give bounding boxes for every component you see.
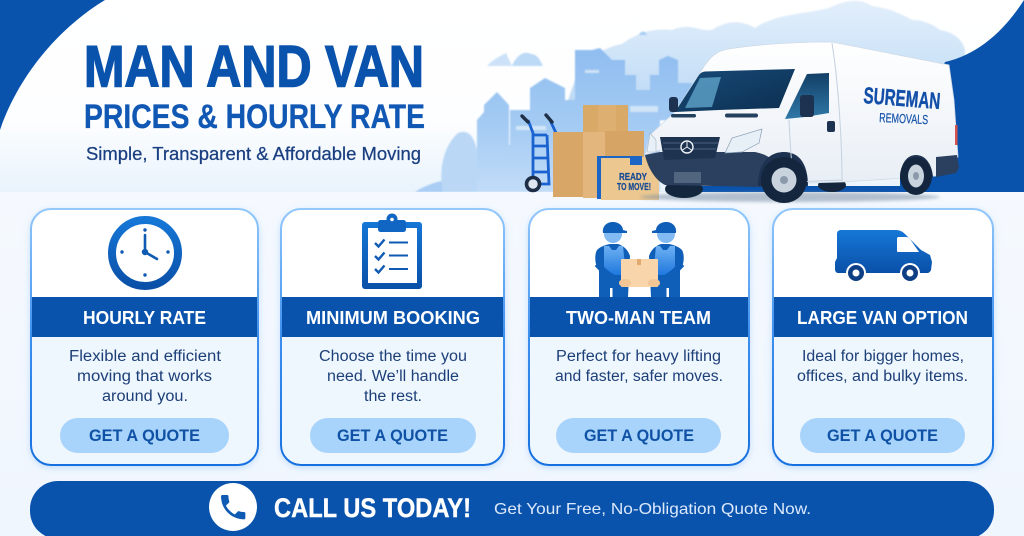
heading: MINIMUM BOOKING xyxy=(306,307,480,328)
card: large van option xyxy=(773,209,993,465)
mirrors xyxy=(800,95,814,117)
hand truck xyxy=(522,115,556,190)
wheel arches xyxy=(758,152,808,186)
van shadow xyxy=(640,192,940,202)
hood vents xyxy=(671,114,696,118)
icon: phone xyxy=(209,483,257,531)
icon: clipboard xyxy=(362,214,422,289)
card: hourly rate xyxy=(31,209,258,465)
heading: TWO-MAN TEAM xyxy=(566,307,711,328)
top-left blue corner xyxy=(0,0,105,130)
description: moving that works xyxy=(77,368,212,385)
description xyxy=(797,348,968,385)
rear wheel xyxy=(900,157,932,195)
description xyxy=(319,348,467,405)
grille xyxy=(660,137,720,160)
call subtext: Get Your Free, No-Obligation Quote Now. xyxy=(494,501,811,518)
mover left xyxy=(595,222,630,297)
white van xyxy=(645,42,959,203)
van branding xyxy=(863,82,941,127)
description: Perfect for heavy lifting xyxy=(556,348,721,365)
heading: LARGE VAN OPTION xyxy=(797,307,968,328)
description: offices, and bulky items. xyxy=(797,368,968,385)
description: around you. xyxy=(102,388,188,405)
button xyxy=(310,418,476,453)
badge xyxy=(681,141,693,153)
front wheel xyxy=(761,157,807,203)
button xyxy=(800,418,965,453)
hero banner xyxy=(0,0,1024,203)
button: GET A QUOTE xyxy=(827,427,938,445)
description: and faster, safer moves. xyxy=(555,368,723,385)
icon: clock xyxy=(112,220,178,286)
right blue sweep xyxy=(690,0,1024,192)
call to action bar xyxy=(30,481,994,536)
box label: READY xyxy=(619,171,647,183)
button xyxy=(60,418,229,453)
city skyline xyxy=(415,48,692,192)
bumper and trim xyxy=(645,152,778,187)
description: Flexible and efficient xyxy=(69,348,222,365)
button: GET A QUOTE xyxy=(337,427,448,445)
box label: TO MOVE! xyxy=(617,181,651,193)
tail light xyxy=(955,125,958,145)
button: GET A QUOTE xyxy=(584,427,694,445)
box label xyxy=(617,171,651,193)
clouds behind city xyxy=(487,1,965,120)
door lines xyxy=(789,43,842,182)
description: the rest. xyxy=(364,388,422,405)
van body xyxy=(645,42,958,184)
description xyxy=(69,348,222,405)
card: two-man team xyxy=(529,209,749,465)
van branding: SUREMAN xyxy=(863,82,941,114)
mover right xyxy=(649,222,684,297)
van branding: REMOVALS xyxy=(879,110,929,127)
hero background xyxy=(0,0,1024,192)
carried box xyxy=(619,259,660,287)
subtitle: PRICES & HOURLY RATE xyxy=(84,98,425,136)
icon: two movers with box xyxy=(595,222,684,297)
cardboard boxes xyxy=(553,105,659,200)
windshield xyxy=(675,69,795,112)
description: need. We’ll handle xyxy=(327,368,459,385)
call heading: CALL US TODAY! xyxy=(274,493,471,523)
headlights xyxy=(725,129,762,153)
button xyxy=(556,418,721,453)
tagline: Simple, Transparent & Affordable Moving xyxy=(86,144,421,164)
description: Choose the time you xyxy=(319,348,467,365)
description: Ideal for bigger homes, xyxy=(802,348,964,365)
heading: HOURLY RATE xyxy=(83,307,206,328)
icon: van xyxy=(835,230,932,283)
description xyxy=(555,348,723,385)
side window xyxy=(785,73,829,119)
main title: MAN AND VAN xyxy=(84,34,424,100)
card: minimum booking xyxy=(281,209,504,465)
title block xyxy=(84,34,425,164)
button: GET A QUOTE xyxy=(89,427,200,445)
far wheels xyxy=(665,180,703,198)
